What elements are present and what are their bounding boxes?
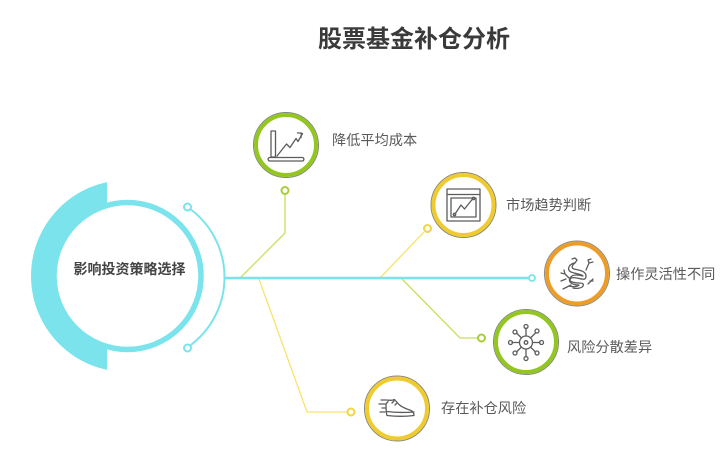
hub outer arc	[190, 208, 225, 346]
badge ring	[254, 112, 318, 178]
label: 存在补仓风险	[441, 401, 526, 417]
connector: yellow up	[380, 232, 424, 278]
hub crescent	[31, 182, 107, 370]
arc bottom node	[184, 344, 191, 352]
badge ring	[364, 376, 430, 441]
badge ring	[494, 310, 558, 374]
icon: network hub	[508, 324, 544, 360]
label: 市场趋势判断	[506, 197, 591, 214]
connector: yellow down	[259, 279, 347, 412]
item: 操作灵活性不同	[544, 241, 715, 306]
hub label: 影响投资策略选择	[74, 261, 186, 277]
icon: browser chart	[447, 189, 480, 221]
node: yellow bottom	[348, 408, 354, 416]
connector: green down	[401, 278, 478, 338]
hub ring	[54, 202, 201, 350]
item: 风险分散差异	[494, 310, 652, 374]
badge ring	[431, 172, 496, 238]
label: 降低平均成本	[332, 133, 417, 149]
icon: branch and snake	[561, 258, 593, 289]
central hub	[31, 180, 225, 372]
node: yellow right	[424, 225, 431, 232]
icon: rising chart	[268, 131, 304, 161]
node: green top	[282, 187, 288, 194]
axis end node	[529, 275, 535, 281]
title: 股票基金补仓分析	[318, 25, 510, 53]
connector: green up	[240, 194, 285, 278]
icon: running shoe	[379, 400, 414, 416]
arc top node	[184, 204, 191, 210]
item: 降低平均成本	[254, 112, 417, 178]
label: 操作灵活性不同	[616, 267, 715, 283]
badge ring	[544, 241, 610, 306]
item: 市场趋势判断	[431, 172, 591, 238]
node: green right	[478, 334, 485, 342]
item: 存在补仓风险	[364, 376, 526, 441]
label: 风险分散差异	[567, 340, 652, 356]
main horizontal axis	[224, 277, 529, 279]
